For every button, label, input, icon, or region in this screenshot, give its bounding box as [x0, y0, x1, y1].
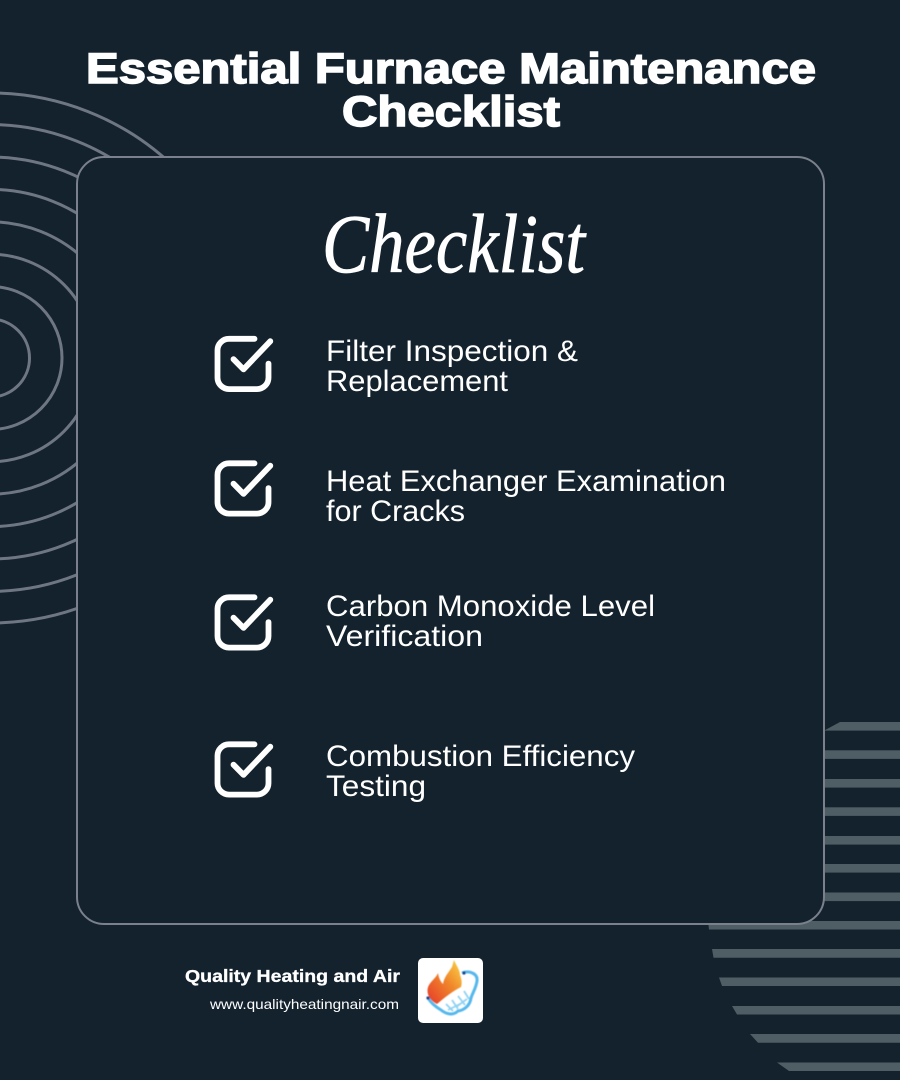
label: filter inspection: Replacement: [326, 365, 509, 398]
footer: company name and url: www.qualityheatingnair.com: [209, 996, 399, 1012]
icon: checkbox: [218, 597, 270, 648]
label: carbon monoxide: Carbon Monoxide Level: [326, 590, 655, 623]
icon: checkbox: [218, 744, 270, 795]
label: filter inspection: Filter Inspection &: [326, 335, 578, 368]
label: heat exchanger: for Cracks: [326, 495, 465, 528]
label: combustion efficiency: Combustion Efficiency: [326, 740, 635, 773]
title: Checklist: [342, 89, 560, 136]
label: combustion efficiency: Testing: [326, 770, 426, 803]
title: [86, 46, 816, 136]
label: combustion efficiency: [326, 740, 635, 803]
decoration: concentric arcs: [0, 93, 256, 623]
footer: company name and url: [185, 966, 400, 1012]
icon: checkbox: [218, 339, 270, 389]
heading: script Checklist: Checklist: [322, 198, 587, 291]
item: carbon monoxide: [218, 590, 655, 653]
footer: company name and url: Quality Heating and Air: [185, 966, 400, 986]
label: carbon monoxide: Verification: [326, 620, 483, 653]
logo: [418, 958, 483, 1023]
item: heat exchanger: [218, 463, 726, 528]
title: Essential Furnace Maintenance: [86, 46, 816, 93]
label: carbon monoxide: [326, 590, 655, 653]
label: filter inspection: [326, 335, 578, 398]
icon: checkbox: [218, 463, 270, 514]
item: combustion efficiency: [218, 740, 635, 803]
item: filter inspection: [218, 335, 578, 398]
decoration: horizontal stripes: [708, 722, 900, 1071]
label: heat exchanger: Heat Exchanger Examination: [326, 465, 726, 498]
label: heat exchanger: [326, 465, 726, 528]
panel: checklist: [77, 157, 824, 924]
